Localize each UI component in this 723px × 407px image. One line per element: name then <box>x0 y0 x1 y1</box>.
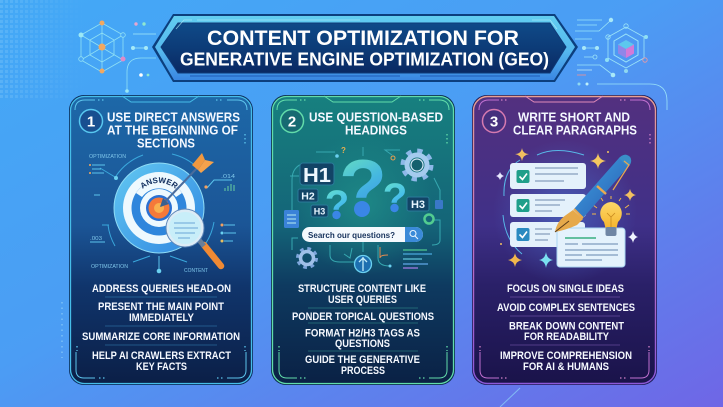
heading tag H3 <box>311 205 328 217</box>
panel 1 heading: SECTIONS <box>137 136 195 150</box>
small data labels: .014 <box>221 174 235 180</box>
icon: fountain pen <box>555 155 631 232</box>
number badge 3: 3 <box>490 114 498 130</box>
title line 1: CONTENT OPTIMIZATION FOR <box>207 27 519 50</box>
icon: green gear <box>424 214 434 224</box>
heading tag H2: H2 <box>301 190 315 202</box>
right question mark: ? <box>383 176 407 220</box>
panel 2 heading: USE QUESTION-BASED <box>309 110 443 124</box>
icon: large gear <box>404 152 430 178</box>
small data labels: OPTIMIZATION <box>91 264 128 270</box>
illustration: headings and question marks <box>284 135 443 275</box>
search bar: Search our questions? <box>308 230 395 240</box>
icon: cube hexagon right <box>575 18 667 110</box>
number badge 2 <box>280 110 304 132</box>
number badge 3 <box>482 110 506 132</box>
panel 2 heading: HEADINGS <box>345 122 407 138</box>
panel 2 bullet list: USER QUERIES <box>328 294 397 306</box>
panel 3 bullet list: FOR READABILITY <box>524 331 610 343</box>
illustration: checklist, pen and bulb <box>493 140 638 284</box>
panel: direct answers <box>69 95 253 385</box>
panel 2 bullet list: PROCESS <box>341 365 385 377</box>
icon: small gear <box>298 249 316 267</box>
text lines graphic <box>403 250 432 268</box>
sparkles <box>496 148 638 268</box>
small data labels: CONTENT <box>184 268 208 274</box>
title banner <box>152 14 578 82</box>
panel 2 bullet list <box>292 283 434 377</box>
illustration: target with arrow and magnifier <box>89 153 236 274</box>
heading tag H1: H1 <box>303 165 331 187</box>
panel 3 bullet list: AVOID COMPLEX SENTENCES <box>497 302 635 314</box>
panel 2 bullet list: GUIDE THE GENERATIVE <box>305 354 420 366</box>
panel 1 heading <box>107 110 240 150</box>
panel 3 bullet list: BREAK DOWN CONTENT <box>509 320 624 332</box>
small data labels: .003 <box>90 236 102 242</box>
panel 3 bullet list: FOCUS ON SINGLE IDEAS <box>507 283 624 295</box>
heading tag H2 <box>298 189 318 202</box>
panel 1 bullet list <box>82 283 240 373</box>
checklist item 2 <box>510 194 586 217</box>
panel: short paragraphs <box>472 95 657 385</box>
panel 3 bullet list: FOR AI & HUMANS <box>523 361 609 373</box>
icon: document <box>284 210 299 228</box>
panel 2 bullet list: PONDER TOPICAL QUESTIONS <box>292 311 434 323</box>
illustration: headings and question marks: ? <box>341 146 346 155</box>
panel 3 heading <box>513 110 637 138</box>
small data labels <box>89 154 235 274</box>
heading tag H3 right <box>407 197 429 211</box>
left question mark: ? <box>325 183 349 227</box>
number badge 1 <box>80 110 102 132</box>
checklist item 1 <box>510 163 586 189</box>
label: answer: ANSWER <box>141 177 178 189</box>
checklist item 3 <box>510 222 585 247</box>
panel 3 heading: WRITE SHORT AND <box>518 110 630 124</box>
panel 1 bullet list: ADDRESS QUERIES HEAD-ON <box>92 283 231 295</box>
icon: light bulb <box>592 196 630 236</box>
small data labels: OPTIMIZATION <box>89 154 126 160</box>
number badge 2: 2 <box>288 114 296 130</box>
panel: question headings <box>271 95 455 385</box>
large question mark: ? <box>339 143 387 231</box>
panel 1 bullet list: IMMEDIATELY <box>129 312 195 324</box>
title line 2: GENERATIVE ENGINE OPTIMIZATION (GEO) <box>180 50 549 70</box>
note card <box>557 228 625 267</box>
heading tag H1 <box>300 163 334 187</box>
search bar <box>302 227 423 242</box>
panel 3 bullet list: IMPROVE COMPREHENSION <box>500 350 632 362</box>
icon: bulb badge <box>354 256 372 272</box>
panel 3 bullet list <box>497 283 635 373</box>
panel 3 heading: CLEAR PARAGRAPHS <box>513 122 637 138</box>
panel 2 bullet list: QUESTIONS <box>335 338 390 350</box>
panel 1 bullet list: SUMMARIZE CORE INFORMATION <box>82 331 240 343</box>
panel 2 bullet list: FORMAT H2/H3 TAGS AS <box>305 328 420 340</box>
heading tag H3 right: H3 <box>411 199 425 211</box>
panel 1 heading: AT THE BEGINNING OF <box>107 122 238 138</box>
panel 2 heading <box>309 110 443 138</box>
number badge 1: 1 <box>87 114 95 130</box>
panel 1 bullet list: KEY FACTS <box>136 361 187 373</box>
panel 1 bullet list: HELP AI CRAWLERS EXTRACT <box>92 350 231 362</box>
heading tag H3: H3 <box>314 206 325 216</box>
panel 1 heading: USE DIRECT ANSWERS <box>107 110 240 124</box>
panel 2 bullet list: STRUCTURE CONTENT LIKE <box>298 283 426 295</box>
icon: network hexagon left <box>78 20 156 93</box>
panel 1 bullet list: PRESENT THE MAIN POINT <box>98 301 224 313</box>
